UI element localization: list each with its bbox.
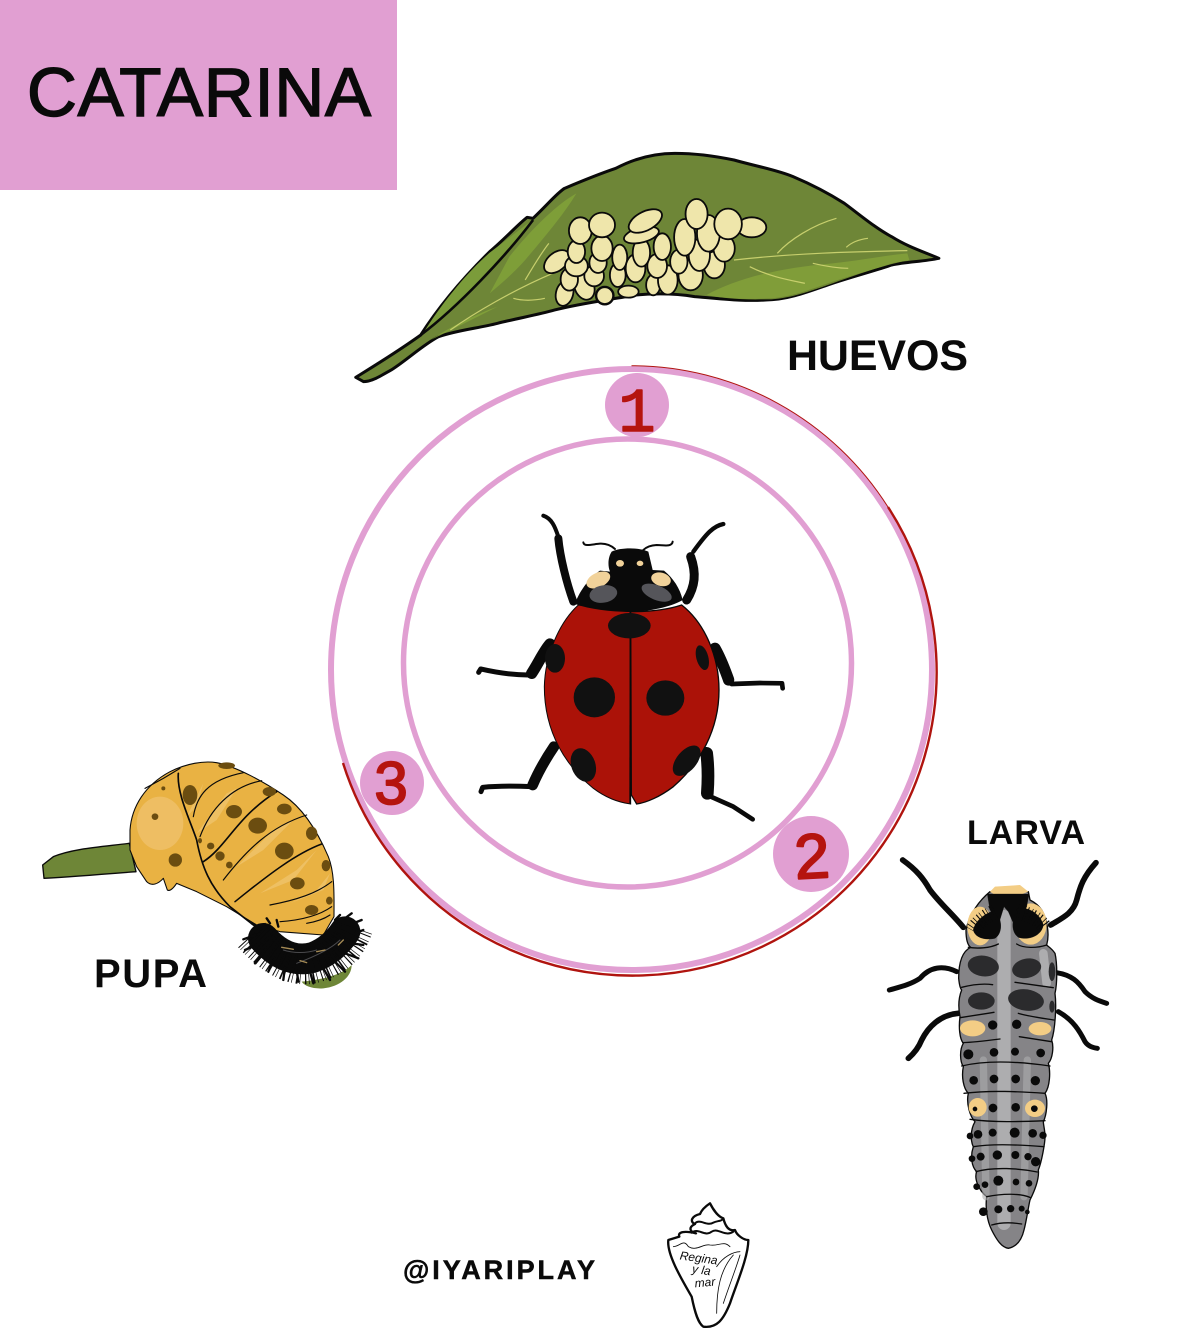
stage badge 2	[773, 816, 849, 893]
lifecycle rings	[331, 366, 937, 976]
legs and antennae	[479, 516, 783, 819]
title banner	[0, 0, 397, 190]
stage badge 3: 3	[374, 750, 408, 817]
head and pronotum	[575, 548, 683, 612]
stage badge 3	[360, 750, 424, 817]
elytra spots	[545, 613, 711, 785]
pupa black bristles	[243, 913, 363, 983]
larva legs	[889, 860, 1107, 1058]
title text: CATARINA	[27, 54, 371, 131]
label: pupa: PUPA	[94, 952, 207, 996]
pupa stem	[43, 843, 136, 878]
stage badge 1	[605, 373, 669, 450]
illustration: leaf with eggs	[356, 153, 939, 382]
shell handwriting	[679, 1248, 719, 1290]
icon: conch shell logo	[668, 1203, 748, 1327]
eggs	[539, 199, 766, 307]
larva pale stripes	[983, 917, 1047, 1223]
elytra	[544, 605, 631, 804]
stage badge 2: 2	[793, 821, 831, 893]
shell handwriting: mar	[694, 1274, 717, 1290]
credit handle: @IYARIPLAY	[403, 1255, 595, 1285]
label: larva: LARVA	[967, 814, 1085, 852]
larva dark patches	[966, 954, 1055, 1013]
larva segment lines	[960, 944, 1054, 1225]
shell handwriting: y la	[690, 1262, 712, 1278]
illustration: larva	[889, 860, 1107, 1248]
stage badge 1: 1	[618, 379, 656, 450]
shell handwriting: Regina	[679, 1248, 719, 1268]
pupa body	[130, 762, 334, 935]
larva yellow patches	[960, 885, 1051, 1117]
illustration: pupa	[43, 762, 363, 988]
illustration: adult ladybug	[479, 516, 783, 819]
pupa spots	[152, 762, 333, 915]
larva body	[959, 892, 1057, 1248]
leaf scrap	[302, 965, 352, 988]
larva dots	[963, 1020, 1047, 1216]
label: huevos: HUEVOS	[787, 332, 968, 380]
pupa segment lines	[145, 768, 332, 925]
larva head fur	[973, 894, 1045, 939]
